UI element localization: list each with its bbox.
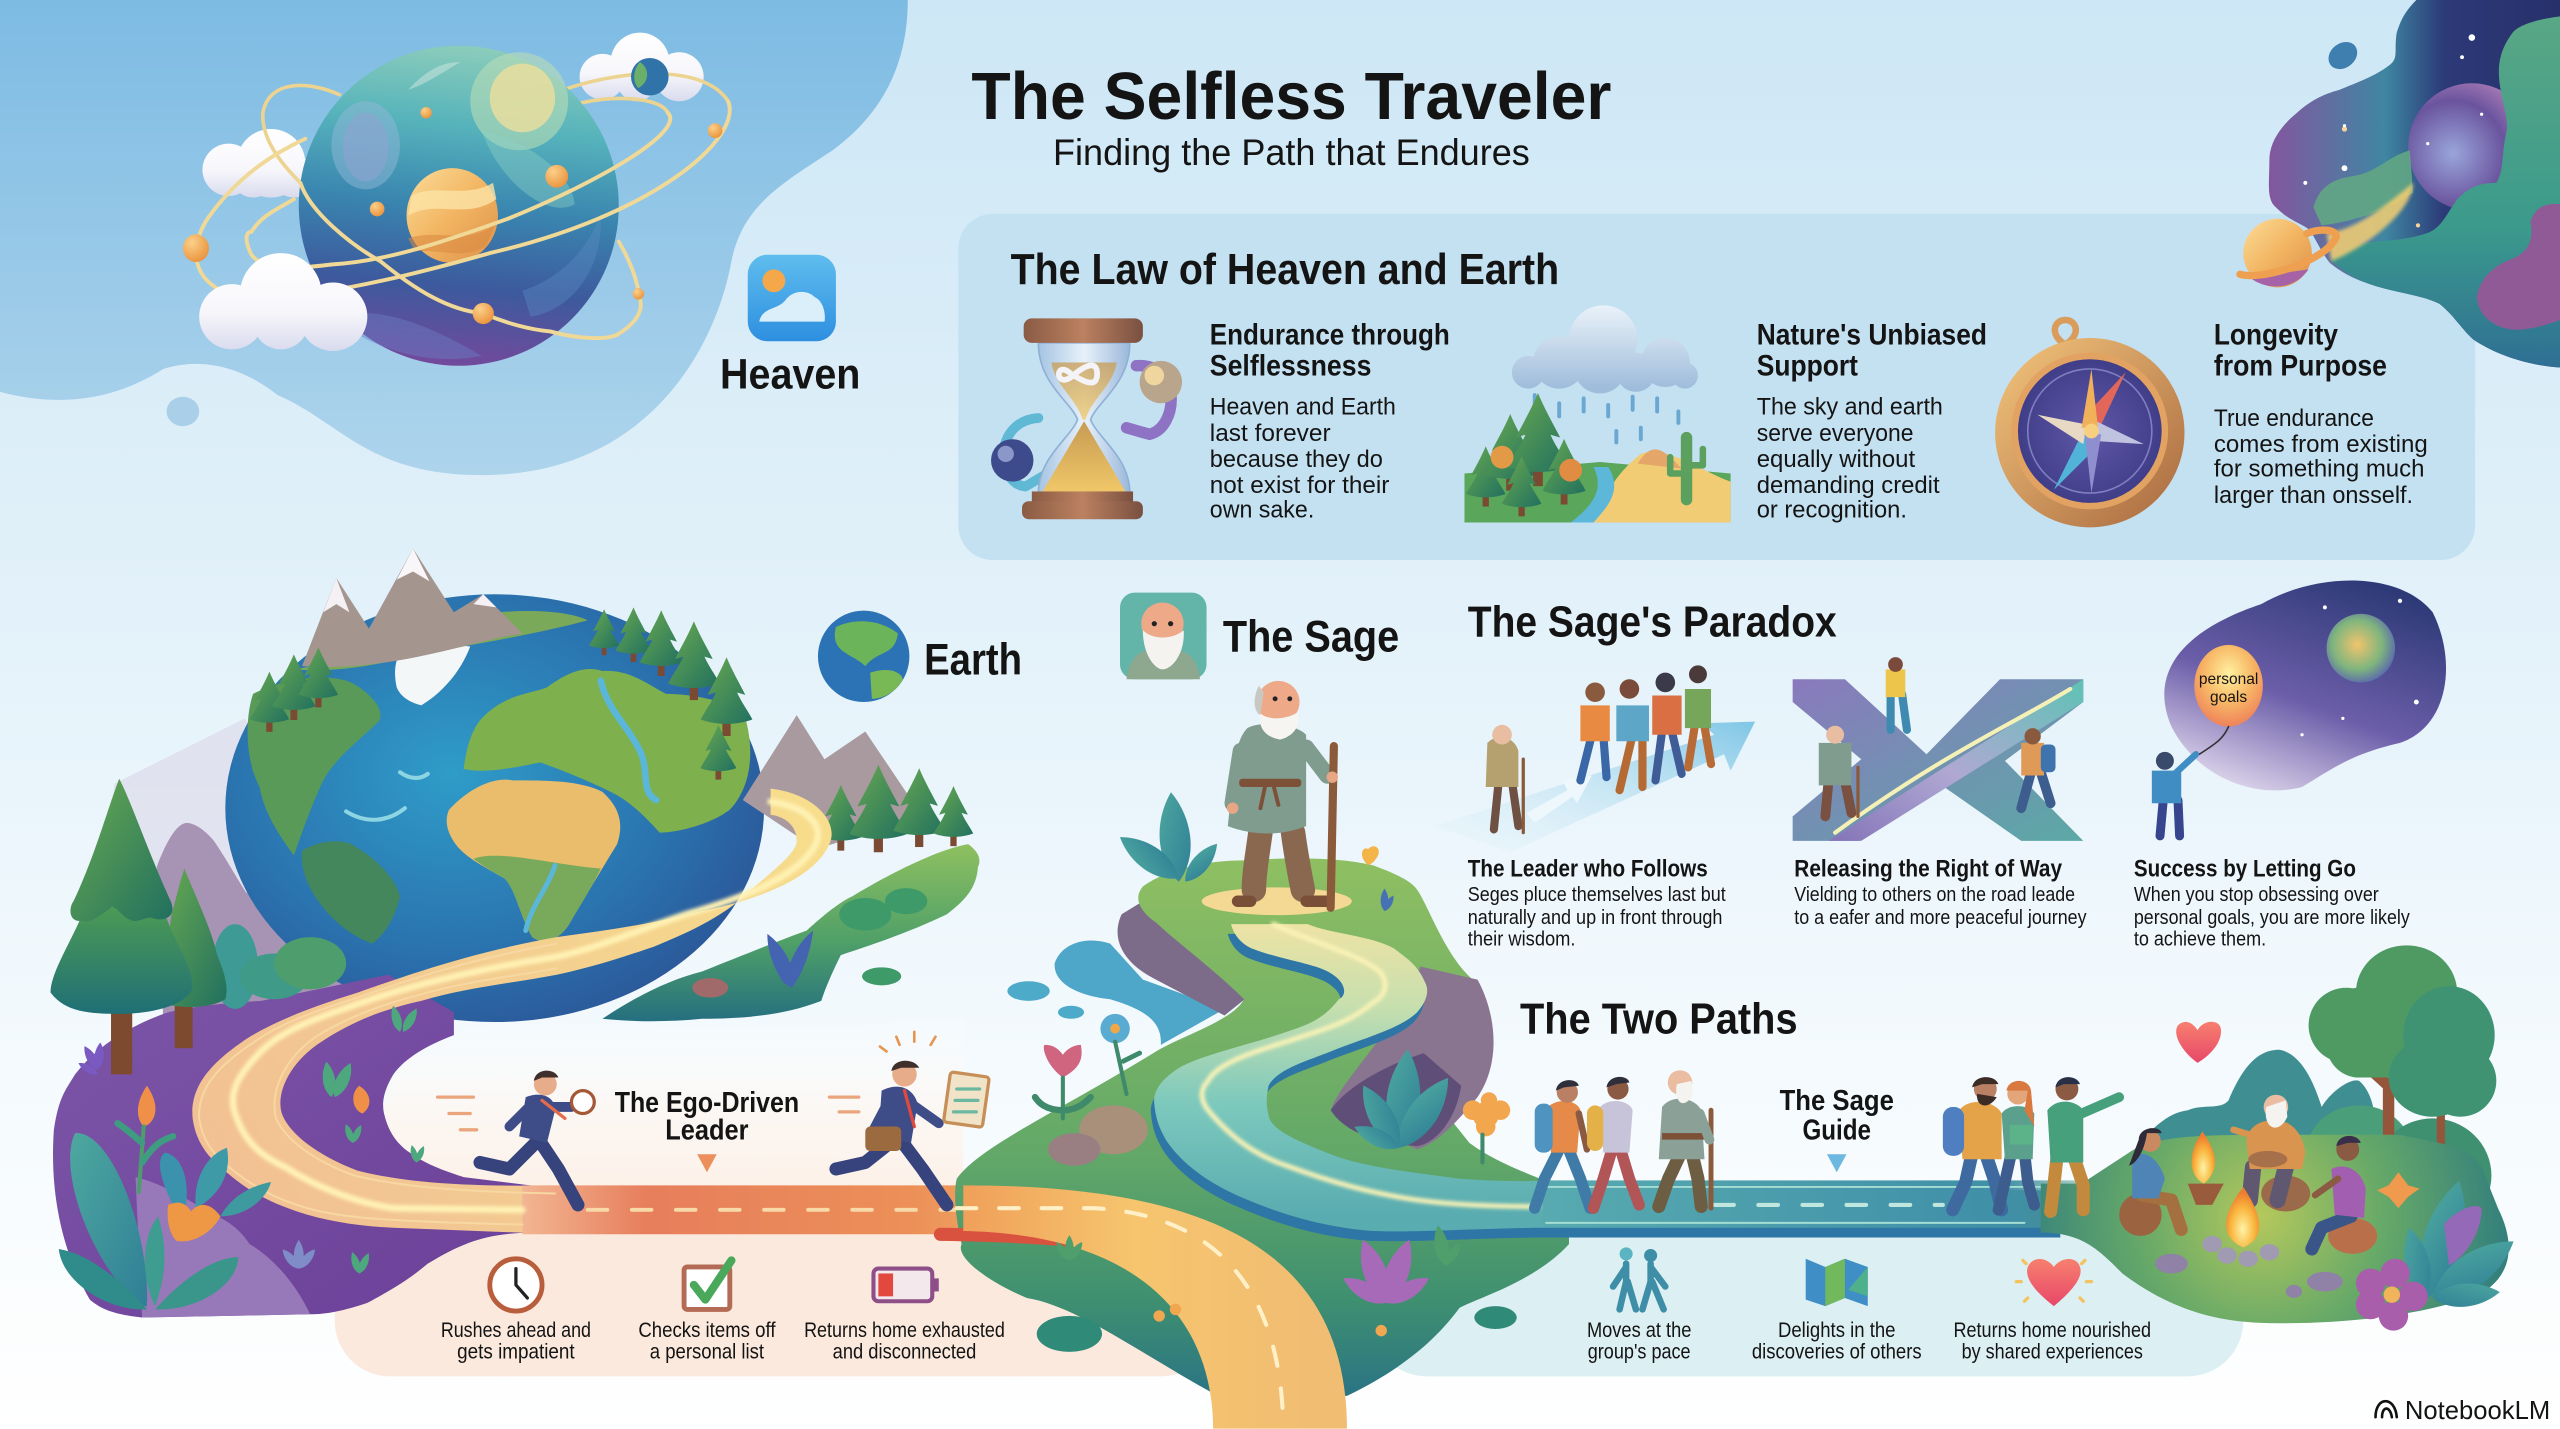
icon: compass	[1995, 320, 2184, 527]
road dashes	[588, 1209, 963, 1211]
paradox text: right of way: Vielding to others on the road leade	[1794, 884, 2075, 906]
sage guide label: Guide	[1802, 1115, 1871, 1147]
ego-driven leader label: The Ego-Driven	[615, 1087, 799, 1119]
hollow	[1331, 1053, 1461, 1146]
walker sage	[1659, 1070, 1711, 1208]
cosmic blob top right	[2269, 0, 2560, 367]
seated woman	[2119, 1128, 2181, 1236]
trees right	[2309, 945, 2496, 1200]
front orbits	[196, 101, 730, 338]
group of walkers	[1580, 665, 1711, 790]
road straight section	[522, 1185, 980, 1234]
big pine top tier	[70, 779, 172, 921]
orange leaf	[2377, 1172, 2420, 1208]
back cloud right	[580, 33, 704, 101]
pink flower	[1035, 1045, 1091, 1118]
text: endurance through selflessness: own sake.	[1210, 497, 1314, 524]
rocks	[1048, 1105, 1148, 1166]
left purple land	[53, 975, 557, 1318]
sage guide label	[1780, 1085, 1894, 1147]
icon: two walkers	[1613, 1247, 1665, 1309]
stones	[2155, 1254, 2343, 1298]
icon: battery	[873, 1269, 939, 1301]
lower ovals	[1037, 1306, 1517, 1352]
paradox text: right of way: Releasing the Right of Way	[1794, 857, 2063, 883]
runner: ego leader 1	[438, 1071, 594, 1205]
ego text columns: a personal list	[650, 1340, 764, 1363]
paradox text: letting go: When you stop obsessing over	[2134, 884, 2379, 906]
hills	[2129, 1050, 2491, 1233]
panel: ego bottom strip	[335, 1200, 1216, 1376]
text: endurance through selflessness: last forever	[1210, 420, 1331, 447]
icon: heaven	[748, 255, 836, 341]
text: longevity from purpose: comes from existing	[2214, 431, 2428, 458]
text: longevity from purpose: for something much	[2214, 456, 2424, 483]
sage guide label: The Sage	[1780, 1085, 1894, 1117]
ego text columns	[441, 1319, 1005, 1363]
walker 5	[1998, 1081, 2034, 1210]
heaven label: Heaven	[720, 351, 860, 398]
teal hill leaves	[1113, 791, 1224, 888]
figure top	[1886, 657, 1907, 730]
purple leaf	[2444, 1206, 2482, 1265]
paradox heading: The Sage's Paradox	[1468, 599, 1837, 647]
balloon: personal	[2199, 671, 2258, 688]
paradox text: leader who follows: The Leader who Follows	[1468, 857, 1708, 883]
small fire	[2188, 1131, 2224, 1205]
text: endurance through selflessness: Endurance through	[1210, 318, 1450, 351]
paradox text: leader who follows: naturally and up in front through	[1468, 907, 1722, 929]
globe planet	[299, 46, 619, 366]
orange tulip big	[168, 1203, 220, 1241]
text: endurance through selflessness: not exist for their	[1210, 472, 1389, 499]
group walkers left	[1535, 1070, 1711, 1208]
ego text columns: Rushes ahead and	[441, 1319, 591, 1342]
heart balloon	[2176, 1022, 2221, 1063]
central green hill	[955, 858, 1569, 1396]
left rock	[1118, 901, 1249, 1016]
figure right	[2021, 728, 2056, 808]
seated man	[2312, 1136, 2377, 1254]
small blue bubble	[2323, 36, 2363, 75]
lilac hump	[136, 1177, 310, 1318]
earth globe	[225, 549, 764, 1022]
main land	[955, 858, 1569, 1396]
right green lobes	[2330, 16, 2560, 367]
balloon: goals	[2210, 689, 2247, 706]
paradox text: right of way	[1794, 857, 2087, 929]
text: endurance through selflessness: because they do	[1210, 446, 1383, 473]
main fire	[2202, 1187, 2279, 1267]
purple lobe	[2477, 204, 2560, 330]
text: endurance through selflessness	[1210, 318, 1450, 524]
hill plants	[1035, 791, 1510, 1336]
seated sage	[2233, 1095, 2310, 1211]
small plants	[320, 1005, 427, 1275]
lavender plant	[77, 1042, 105, 1078]
panel: law of heaven and earth	[958, 214, 2475, 560]
rainbow planet	[2327, 614, 2395, 682]
red road edge	[940, 1234, 1216, 1355]
text: nature's unbiased support	[1757, 318, 1987, 524]
ego text columns: and disconnected	[833, 1340, 976, 1363]
orange flower	[1463, 1092, 1510, 1162]
ego text columns: Checks items off	[638, 1319, 776, 1342]
road edge lines	[199, 944, 557, 1224]
figure left	[1819, 726, 1858, 816]
two paths heading: The Two Paths	[1520, 995, 1798, 1043]
walker 2	[1587, 1077, 1639, 1208]
walker 6	[2047, 1077, 2119, 1211]
sage icon	[1120, 593, 1207, 679]
icon: checkbox	[684, 1260, 731, 1309]
ground	[2041, 1135, 2509, 1323]
sage text columns: group's pace	[1588, 1340, 1691, 1363]
text: nature's unbiased support: or recognition.	[1757, 497, 1907, 524]
blue flower	[1100, 1014, 1140, 1094]
continents	[248, 645, 750, 944]
sage label: The Sage	[1223, 612, 1399, 661]
trunks	[111, 999, 193, 1074]
text: nature's unbiased support: demanding credit	[1757, 472, 1940, 499]
big pine bottom tier	[51, 908, 193, 1014]
shrubs	[212, 924, 346, 1009]
straight sage road	[1543, 1180, 2114, 1228]
top land strip	[294, 611, 588, 670]
subtitle: Finding the Path that Endures	[1053, 132, 1530, 173]
blue-lilac sprig	[279, 1240, 318, 1271]
icon: map	[1806, 1259, 1868, 1306]
purple plant	[1339, 1236, 1433, 1310]
flower	[2356, 1259, 2428, 1331]
sage text columns: Returns home nourished	[1953, 1319, 2151, 1342]
right rock	[1331, 967, 1494, 1149]
runner: ego leader 2	[829, 1032, 989, 1205]
small bubble	[167, 397, 199, 426]
water pool	[1055, 941, 1224, 1045]
walker 1	[1535, 1080, 1590, 1208]
pointer blue	[1827, 1154, 1847, 1172]
comet trail	[2327, 183, 2413, 261]
sage text columns: Delights in the	[1778, 1319, 1896, 1342]
road surface	[1154, 924, 1551, 1231]
orbit balls	[183, 123, 722, 324]
ringed planet	[2240, 219, 2336, 287]
curved section	[192, 789, 832, 1234]
second pine	[160, 869, 227, 1007]
notebooklm logo: NotebookLM	[2405, 1395, 2550, 1425]
group walkers right	[1943, 1077, 2119, 1211]
back cloud left	[202, 129, 315, 198]
text: longevity from purpose: from Purpose	[2214, 350, 2387, 383]
illustration: leader who follows	[1435, 665, 1755, 852]
pebbles	[1007, 981, 1084, 1019]
paradox text: letting go: personal goals, you are more likely	[2134, 907, 2410, 929]
sage road	[1151, 924, 2114, 1241]
back orbits	[263, 74, 728, 183]
road surface	[963, 1185, 1347, 1429]
road glow line	[1202, 924, 1538, 1207]
text: nature's unbiased support: equally without	[1757, 446, 1915, 473]
ego road over hill	[940, 1185, 1347, 1429]
stars	[2303, 34, 2483, 227]
illustration: balloon	[2152, 581, 2446, 836]
ego-driven leader label	[615, 1087, 799, 1147]
icon: clock	[490, 1259, 542, 1311]
front big cloud	[199, 253, 367, 351]
small orange	[353, 1086, 369, 1113]
text: longevity from purpose: Longevity	[2214, 318, 2339, 351]
ego text columns: Returns home exhausted	[804, 1319, 1005, 1342]
hill top	[1202, 887, 1352, 915]
text: longevity from purpose: True endurance	[2214, 405, 2374, 432]
big plant in hollow	[1351, 1048, 1460, 1156]
text: longevity from purpose	[2214, 318, 2428, 509]
cosmic planet	[2408, 83, 2536, 211]
ego bay background	[384, 1012, 963, 1216]
ego-driven leader label: Leader	[665, 1115, 749, 1147]
campfire scene	[2119, 1095, 2377, 1267]
ego text columns: gets impatient	[457, 1340, 575, 1363]
panel: sage bottom strip	[1371, 1200, 2243, 1376]
panel heading: The Law of Heaven and Earth	[1011, 246, 1559, 294]
text: nature's unbiased support: Support	[1757, 350, 1858, 383]
heaven blob	[0, 0, 908, 475]
right earth islet	[602, 715, 979, 1021]
earth label: Earth	[924, 635, 1022, 684]
road dashes	[957, 1208, 1283, 1429]
mountains behind left	[98, 718, 392, 1020]
text: endurance through selflessness: Selflessness	[1210, 350, 1371, 383]
paradox text: letting go: Success by Letting Go	[2134, 857, 2356, 883]
person reaching	[2152, 752, 2196, 836]
paradox text: leader who follows	[1468, 857, 1726, 950]
earth icon	[818, 611, 909, 702]
sage text columns: Moves at the	[1587, 1319, 1691, 1342]
text: nature's unbiased support: serve everyone	[1757, 420, 1913, 447]
text: nature's unbiased support: Nature's Unbiased	[1757, 318, 1987, 351]
ego road	[192, 789, 980, 1234]
stars	[2300, 599, 2419, 736]
jupiter sphere	[407, 168, 498, 263]
title: The Selfless Traveler	[971, 59, 1611, 134]
paradox text: letting go: to achieve them.	[2134, 928, 2266, 950]
upper-left green wisp	[2313, 150, 2413, 225]
trees on globe	[250, 607, 752, 780]
icon: hourglass	[991, 318, 1182, 519]
sage text columns	[1587, 1319, 2151, 1363]
right land: campfire	[2041, 945, 2523, 1331]
road dashes	[1714, 1204, 1943, 1206]
text: nature's unbiased support: The sky and earth	[1757, 394, 1943, 421]
small earth	[631, 58, 669, 96]
balloon	[2194, 645, 2263, 754]
paradox text: leader who follows: Seges pluce themselves last but	[1468, 884, 1726, 906]
icon: rain cloud over landscape	[1464, 305, 1731, 522]
heaven illustration	[183, 33, 730, 366]
planet swirls	[331, 52, 601, 359]
paradox text: letting go	[2134, 857, 2410, 950]
left foreground trees and plants	[51, 779, 427, 1309]
road glow line	[233, 802, 818, 1210]
text: endurance through selflessness: Heaven and Earth	[1210, 394, 1396, 421]
foliage	[2398, 1176, 2523, 1312]
small balls	[370, 107, 568, 216]
walker 4	[1943, 1077, 2002, 1210]
big leaves	[59, 1133, 271, 1309]
lower bits	[1053, 1224, 1464, 1268]
paradox text: leader who follows: their wisdom.	[1468, 928, 1576, 950]
top mountains	[302, 549, 522, 667]
pointer orange	[697, 1154, 717, 1172]
sage text columns: by shared experiences	[1962, 1340, 2143, 1363]
text: longevity from purpose: larger than onsself.	[2214, 482, 2413, 509]
small flower	[118, 1086, 173, 1192]
sage text columns: discoveries of others	[1752, 1340, 1922, 1363]
road dark underside	[1151, 934, 2060, 1241]
figure: sage	[1227, 681, 1338, 908]
paradox text: right of way: to a eafer and more peaceful journey	[1794, 907, 2087, 929]
illustration: crossroads	[1793, 657, 2083, 841]
icon: heart	[2016, 1259, 2091, 1306]
